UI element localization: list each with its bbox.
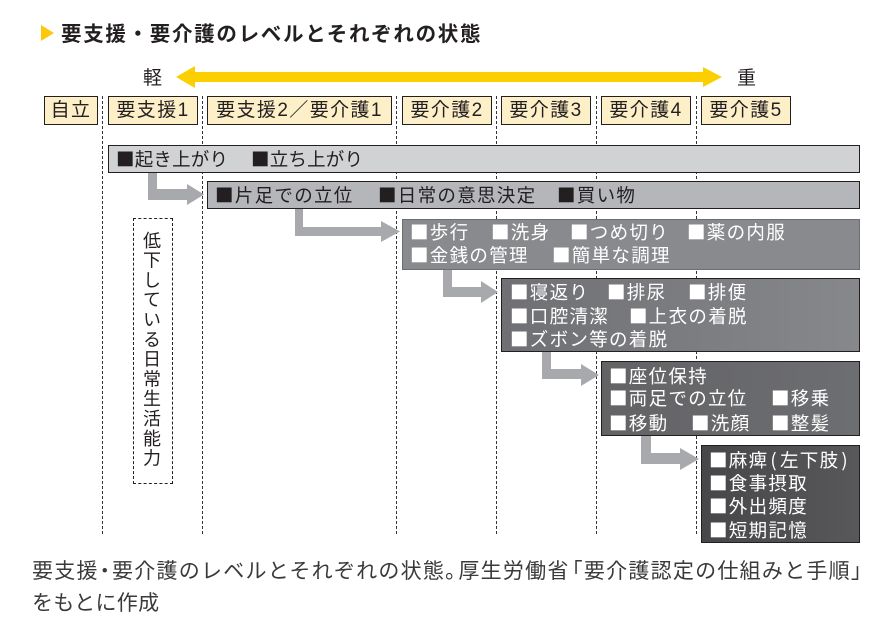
item: ■食事摂取 [709, 470, 808, 496]
item: ■日常の意思決定 [378, 182, 536, 208]
label: heavy: 重 [737, 68, 756, 89]
item: ■立ち上がり [251, 146, 363, 172]
level header: 要支援2/要介護1: 要支援2／要介護1 [216, 100, 383, 121]
item: ■洗顔 [691, 410, 750, 436]
panel: 要介護2 declines [402, 219, 860, 270]
item: ■麻痺(左下肢) [709, 447, 849, 473]
item: ■洗身 [491, 219, 550, 245]
item: ■排便 [688, 279, 747, 305]
panel: 要支援1 declines [108, 145, 860, 173]
item: ■両足での立位 [609, 385, 748, 411]
panel: 要介護5 declines [701, 445, 860, 543]
item: ■買い物 [557, 182, 636, 208]
vertical text: 低下している日常生活能力 [141, 231, 161, 469]
item: ■移乗 [771, 385, 830, 411]
level header: 要介護2 [402, 96, 492, 124]
level header: 自立 [44, 96, 98, 124]
level header: 要支援2/要介護1 [207, 96, 392, 124]
item: ■口腔清潔 [510, 303, 609, 329]
arrow: 要介護4 to 要介護5 [641, 436, 699, 470]
level header: 要介護5: 要介護5 [709, 100, 783, 121]
item: ■簡単な調理 [552, 242, 671, 268]
panel: 要介護4 declines [601, 361, 860, 436]
level header: 要介護3 [501, 96, 591, 124]
item: ■整髪 [771, 410, 830, 436]
icon: title triangle [41, 25, 54, 41]
item: ■片足での立位 [215, 182, 354, 208]
level header: 要支援1: 要支援1 [116, 100, 190, 121]
level header: 自立: 自立 [51, 100, 91, 121]
arrow: severity scale [176, 66, 722, 88]
panel: 要支援2/要介護1 declines [207, 181, 860, 209]
item: ■つめ切り [570, 219, 669, 245]
item: ■上衣の着脱 [629, 303, 748, 329]
title [41, 23, 482, 46]
item: ■寝返り [510, 279, 589, 305]
level header: 要介護2: 要介護2 [410, 100, 484, 121]
level header: 要介護4: 要介護4 [609, 100, 683, 121]
item: ■排尿 [607, 279, 666, 305]
arrow: 要介護2 to 要介護3 [443, 270, 498, 303]
level header: 要介護5 [701, 96, 791, 124]
level header: 要介護3: 要介護3 [509, 100, 583, 121]
level header: 要支援1 [108, 96, 198, 124]
arrow: 要介護3 to 要介護4 [542, 352, 599, 386]
label: light: 軽 [143, 68, 162, 89]
item: ■金銭の管理 [410, 242, 529, 268]
arrow: 要支援1 to 要支援2 [148, 173, 204, 205]
caption [32, 560, 873, 615]
item: ■薬の内服 [687, 219, 786, 245]
item: ■起き上がり [116, 146, 228, 172]
item: ■歩行 [410, 219, 469, 245]
item: ■短期記憶 [709, 517, 808, 543]
item: ■外出頻度 [709, 493, 808, 519]
item: ■移動 [609, 410, 668, 436]
title text: 要支援・要介護のレベルとそれぞれの状態 [61, 23, 482, 46]
item: ■ズボン等の着脱 [510, 326, 668, 352]
panel: 要介護3 declines [501, 278, 860, 352]
caption: をもとに作成 [32, 592, 159, 615]
item: ■座位保持 [609, 363, 708, 389]
level header: 要介護4 [601, 96, 691, 124]
caption: 要支援・要介護のレベルとそれぞれの状態。厚生労働省「要介護認定の仕組みと手順」 [32, 560, 873, 583]
callout: declining daily living ability [133, 218, 173, 484]
arrow: 要支援2 to 要介護2 [295, 209, 400, 242]
